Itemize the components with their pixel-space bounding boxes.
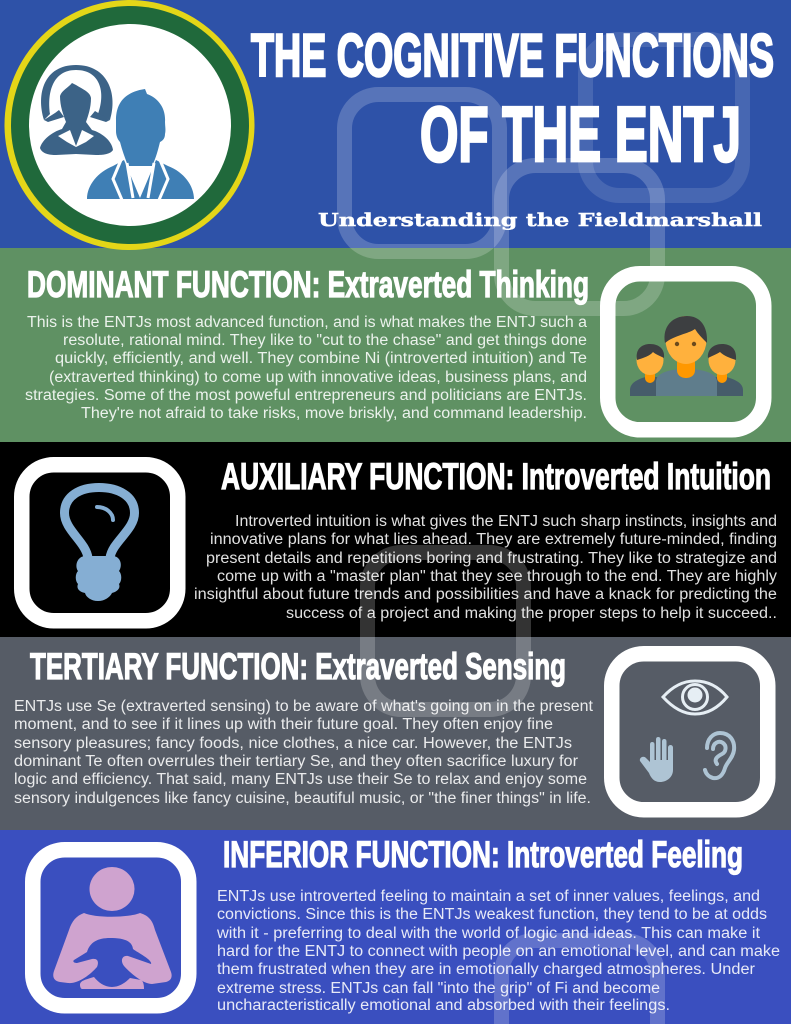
text: dominant body: resolute, rational mind. They like to "cut to the chase" and get things done — [63, 332, 587, 349]
band: dominant background — [0, 248, 791, 442]
icon: lightbulb — [64, 488, 134, 601]
text: inferior body: with it - preferring to deal with the world of logic and ideas. This can make it — [216, 925, 761, 942]
text: dominant body: quickly, efficiently, and well. They combine Ni (introverted intuition) and Te — [55, 350, 587, 367]
icon: ear — [705, 733, 734, 778]
background chain link shapes — [344, 40, 742, 1024]
icon frame: inner feeling — [33, 850, 189, 1006]
text: auxiliary body: insightful about future trends and possibilities and have a knack for predicting the — [194, 586, 777, 603]
icon: three people — [630, 316, 743, 396]
icon frame: lightbulb — [22, 465, 178, 621]
text: auxiliary body: present details and repetitions boring and frustrating. They like to strategize and — [206, 550, 777, 567]
text: tertiary body — [14, 698, 594, 807]
text: inferior body: ENTJs use introverted feeling to maintain a set of inner values, feelings, and — [217, 888, 760, 905]
heading: tertiary: TERTIARY FUNCTION: Extraverted Sensing — [30, 646, 566, 687]
band: auxiliary background — [0, 442, 791, 637]
text: dominant body: They're not afraid to take risks, move briskly, and command leadership. — [81, 405, 587, 422]
icon frame: senses — [612, 654, 768, 810]
icon: eye — [663, 681, 727, 714]
band: tertiary background — [0, 637, 791, 830]
icon: man silhouette — [87, 89, 194, 200]
panel: auxiliary function — [22, 456, 777, 622]
band: header background — [0, 0, 791, 248]
emblem: ringed portrait — [4, 0, 254, 250]
icon: hand — [640, 737, 673, 782]
panel: inferior function — [33, 834, 780, 1014]
text: dominant body: This is the ENTJs most advanced function, and is what makes the ENTJ such a — [27, 314, 587, 331]
text: dominant body — [25, 314, 587, 422]
panel: dominant function — [25, 264, 764, 430]
text: tertiary body: moment, and to see if it lines up with their future goal. They often enjoy fine — [14, 716, 553, 733]
text: tertiary body: sensory pleasures; fancy foods, nice clothes, a nice car. However, the ENTJs — [14, 735, 572, 752]
subtitle: Understanding the Fieldmarshall — [318, 210, 762, 231]
text: inferior body: hard for the ENTJ to connect with people on an emotional level, and can make — [217, 943, 780, 960]
text: inferior body: them frustrated when they are in emotionally charged atmospheres. Under — [217, 961, 755, 978]
text: inferior body: convictions. Since this is the ENTJs weakest function, they tend to be at odds — [217, 906, 767, 923]
icon: woman silhouette — [40, 65, 113, 155]
icon: person holding heart — [53, 867, 172, 989]
text: auxiliary body: come up with a "master plan" that they see through to the end. They are highly — [217, 568, 777, 585]
text: inferior body — [216, 888, 780, 1014]
text: inferior body: uncharacteristically emotional and absorbed with their feelings. — [217, 997, 670, 1014]
icon frame: team — [608, 274, 764, 430]
title — [251, 22, 774, 178]
text: dominant body: (extraverted thinking) to come up with innovative ideas, business plans, and — [49, 369, 587, 386]
text: tertiary body: logic and efficiency. That said, many ENTJs use their Se to relax and enjoy some — [14, 771, 587, 788]
panel: tertiary function — [14, 646, 768, 810]
text: inferior body: extreme stress. ENTJs can fall "into the grip" of Fi and become — [217, 980, 660, 997]
text: tertiary body: ENTJs use Se (extraverted sensing) to be aware of what's going on in the present — [14, 698, 594, 715]
text: tertiary body: sensory indulgences like fancy cuisine, beautiful music, or "the finer things" in life. — [14, 790, 591, 807]
text: auxiliary body: success of a project and making the proper steps to help it succeed.. — [286, 605, 777, 622]
text: auxiliary body — [194, 513, 777, 622]
text: auxiliary body: innovative plans for what lies ahead. They are extremely future-minded, finding — [210, 531, 777, 548]
text: auxiliary body: Introverted intuition is what gives the ENTJ such sharp instincts, insights and — [235, 513, 777, 530]
text: tertiary body: dominant Te often overrules their tertiary Se, and they often sacrifice luxury for — [14, 753, 578, 770]
band: inferior background — [0, 830, 791, 1024]
text: dominant body: strategies. Some of the most poweful entrepreneurs and politicians are ENTJs. — [25, 387, 587, 404]
